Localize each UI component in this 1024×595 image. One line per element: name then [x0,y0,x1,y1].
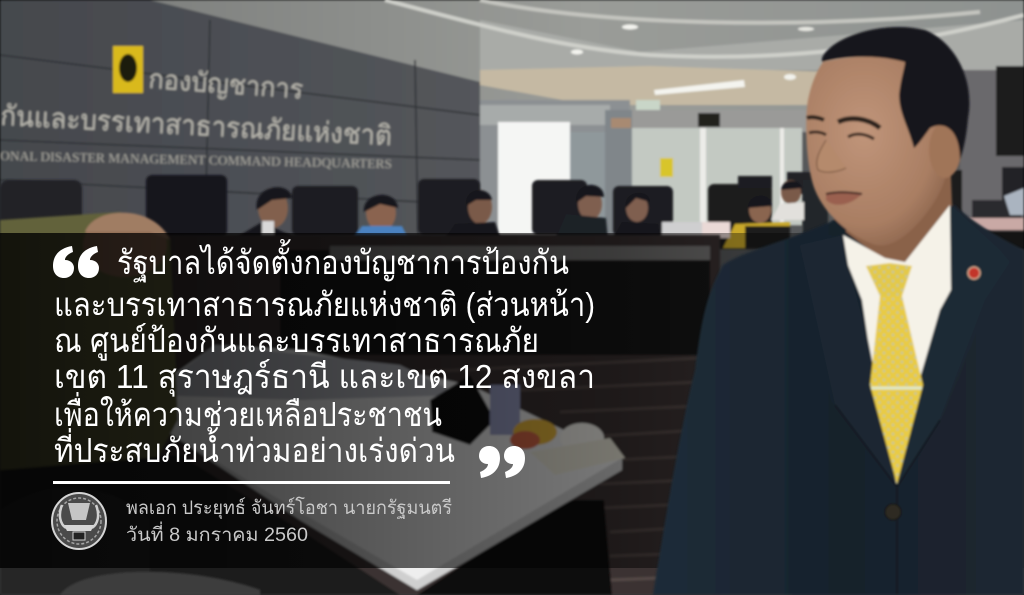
attribution text [126,496,452,546]
opening quotation mark [53,246,99,278]
jacket button [885,504,901,520]
seated officials and chairs [0,172,828,249]
wall sign: กองบัญชาการ [148,64,304,105]
attribution text: พลเอก ประยุทธ์ จันทร์โอชา นายกรัฐมนตรี [126,496,452,520]
neck [846,150,952,262]
quote text: ณ ศูนย์ป้องกันและบรรเทาสาธารณภัย [54,322,539,361]
icon: government seal [52,493,106,549]
suit lapels [800,235,897,487]
shirt collar [843,205,951,485]
foreground: desks, table, carpet [0,212,720,595]
person 1 [232,187,295,245]
person 2 [352,195,409,240]
lapel pin [968,267,980,279]
suit jacket [653,205,1024,595]
necktie [866,263,923,484]
attribution text: วันที่ 8 มกราคม 2560 [126,521,308,546]
person 6 [723,180,804,248]
translucent dark text band [0,233,1024,568]
quote text: เขต 11 สุราษฎร์ธานี และเขต 12 สงขลา [54,358,595,397]
eyes and brows [807,117,880,139]
quote text: และบรรเทาสาธารณภัยแห่งชาติ (ส่วนหน้า) [54,286,595,323]
quote text: ที่ประสบภัยน้ำท่วมอย่างเร่งด่วน [54,427,455,469]
person 4 [555,185,608,240]
face [806,56,950,246]
quote text [54,239,595,469]
wall sign [0,46,393,171]
quote text: รัฐบาลได้จัดตั้งกองบัญชาการป้องกัน [117,239,569,283]
nose and mouth [817,140,862,205]
wall sign: กันและบรรเทาสาธารณภัยแห่งชาติ [0,100,393,152]
divider line [53,481,450,484]
quote text: เพื่อให้ความช่วยเหลือประชาชน [54,392,442,433]
wall sign: ONAL DISASTER MANAGEMENT COMMAND HEADQUARTERS [0,148,392,171]
ear [929,122,961,178]
person 3 [444,190,501,240]
closing quotation mark [479,446,525,478]
person 5 [612,193,660,240]
portrait: prime minister [653,27,1024,595]
hair [822,27,969,160]
